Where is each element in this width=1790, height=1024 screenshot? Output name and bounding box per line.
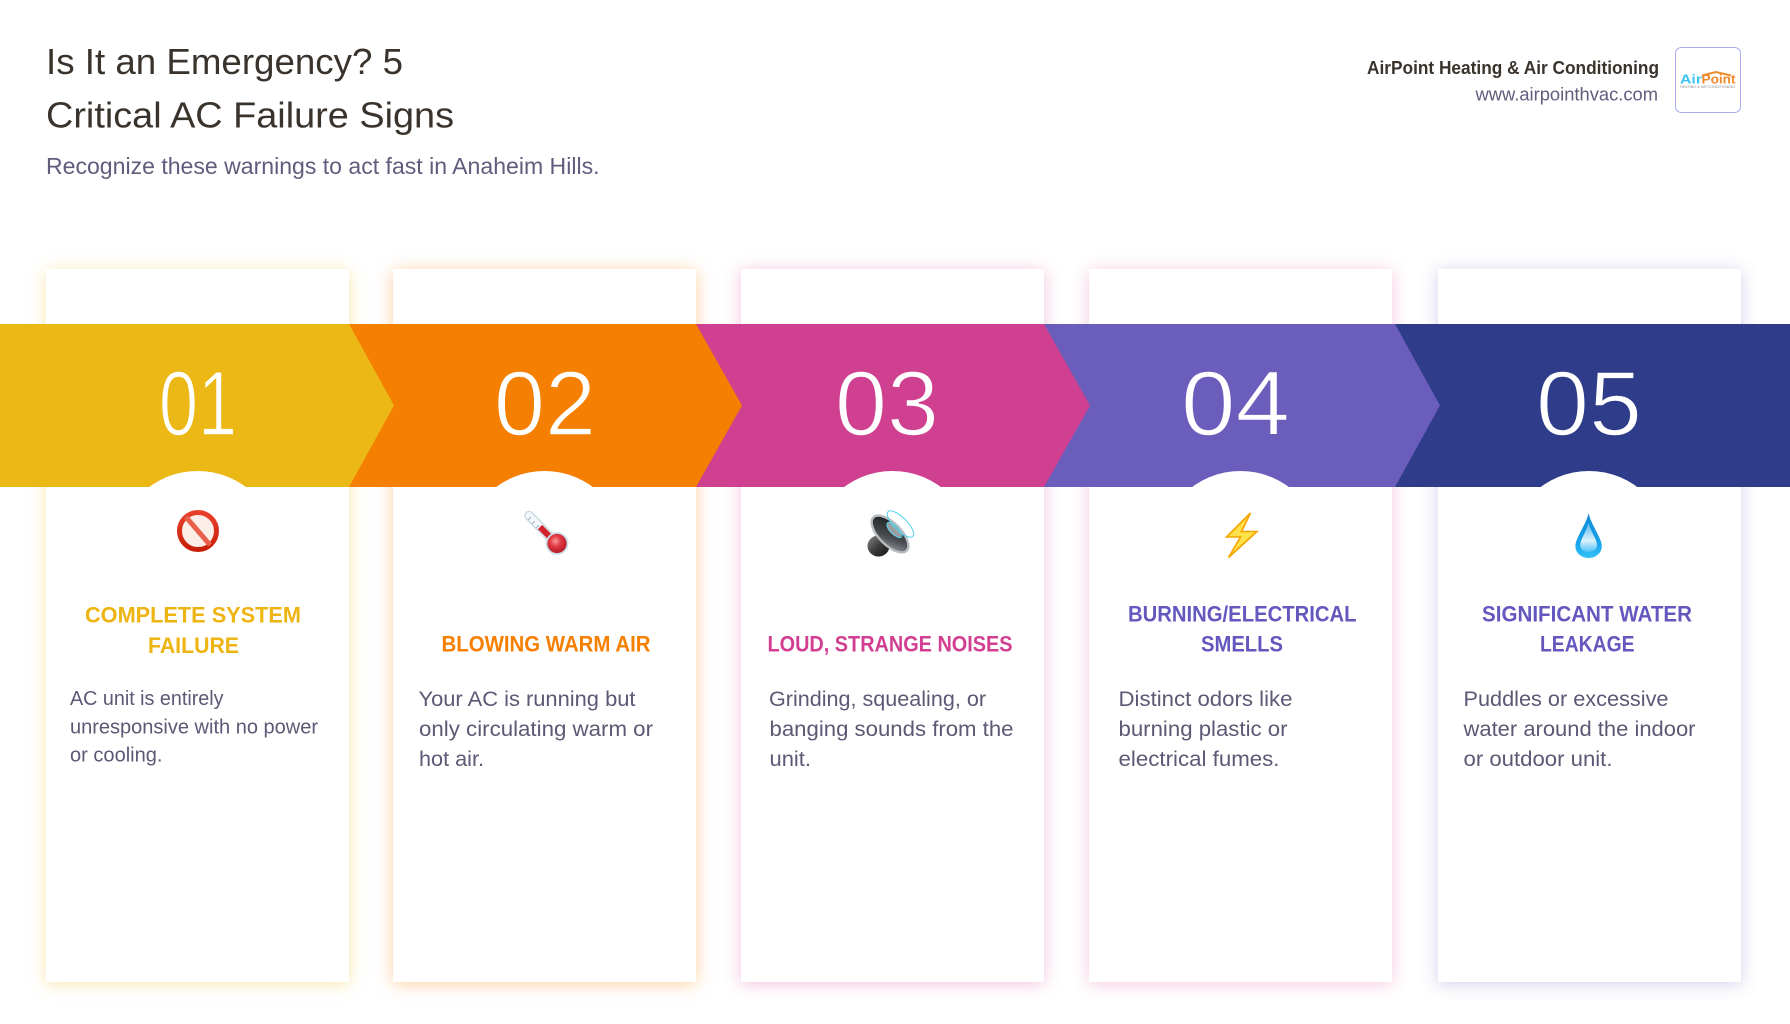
description [1462,688,1696,771]
heading: SIGNIFICANT WATER [1482,602,1692,627]
number 04: 04 [1181,353,1290,455]
heading: LEAKAGE [1540,632,1634,657]
panel: card 2 content [418,471,653,771]
icon tab circle [464,471,626,633]
company name: AirPoint Heating & Air Conditioning [1367,57,1659,78]
number 03: 03 [835,353,939,455]
description: electrical fumes. [1118,748,1280,771]
icon: thermometer [528,516,568,555]
icon: prohibited sign [180,512,216,550]
heading: LOUD, STRANGE NOISES [768,632,1012,657]
arrow segment 3 [695,324,1090,487]
icon tab circle [1508,471,1670,633]
number 01: 01 [159,353,237,455]
icon: speaker [866,507,917,558]
panel: card 5 content [1462,471,1696,771]
arrow segment 1 [0,324,394,487]
panel: card 5 background [1438,269,1741,982]
subtitle: Recognize these warnings to act fast in Anaheim Hills. [46,153,600,179]
chevron band [0,324,1790,487]
description: Puddles or excessive [1464,688,1668,711]
description [418,688,653,771]
description [769,688,1014,771]
description [70,688,318,767]
description: water around the indoor [1462,718,1696,741]
description [1118,688,1292,771]
heading: BURNING/ELECTRICAL [1128,602,1357,627]
description: only circulating warm or [419,718,653,741]
icon tab circle [812,471,974,633]
description: AC unit is entirely [70,688,224,710]
description: Distinct odors like [1118,688,1292,711]
title: Critical AC Failure Signs [46,94,454,136]
panel: card 1 background [46,269,349,982]
logo: HEATING & AIR CONDITIONING [1680,85,1735,89]
panel: card 3 content [768,471,1014,771]
panel: card 1 content [70,471,318,767]
header: title and subtitle [46,41,600,179]
icon tab circle [1160,471,1322,633]
description: or cooling. [70,745,162,767]
arrow segment 5 [1394,324,1790,487]
description: unit. [770,748,811,771]
panel: card 4 content [1118,471,1357,771]
panel: card 3 background [741,269,1044,982]
description: banging sounds from the [770,718,1014,741]
heading: FAILURE [148,633,239,658]
description: burning plastic or [1118,718,1288,741]
panel: card 4 background [1089,269,1392,982]
description: unresponsive with no power [70,716,318,738]
arrow segment 2 [348,324,742,487]
heading [85,603,301,658]
panel: card 2 background [393,269,696,982]
number 05: 05 [1536,353,1642,455]
arrow segment 4 [1043,324,1440,487]
title [46,41,454,136]
description: Your AC is running but [418,688,636,711]
icon: lightning bolt [1226,513,1257,558]
website: www.airpointhvac.com [1474,84,1658,104]
heading [1128,602,1357,657]
description: Grinding, squealing, or [769,688,986,711]
brand block [1367,48,1740,112]
logo: Air [1680,72,1702,86]
logo [1676,48,1740,112]
heading [1482,602,1692,657]
number 02: 02 [494,353,596,455]
heading: COMPLETE SYSTEM [85,603,301,628]
title: Is It an Emergency? 5 [46,41,403,82]
icon tab circle [116,471,278,633]
heading: SMELLS [1201,632,1283,657]
icon: water drop [1575,513,1602,558]
description: hot air. [419,748,484,771]
logo: Point [1702,72,1736,86]
description: or outdoor unit. [1464,748,1612,771]
heading: BLOWING WARM AIR [442,632,650,657]
